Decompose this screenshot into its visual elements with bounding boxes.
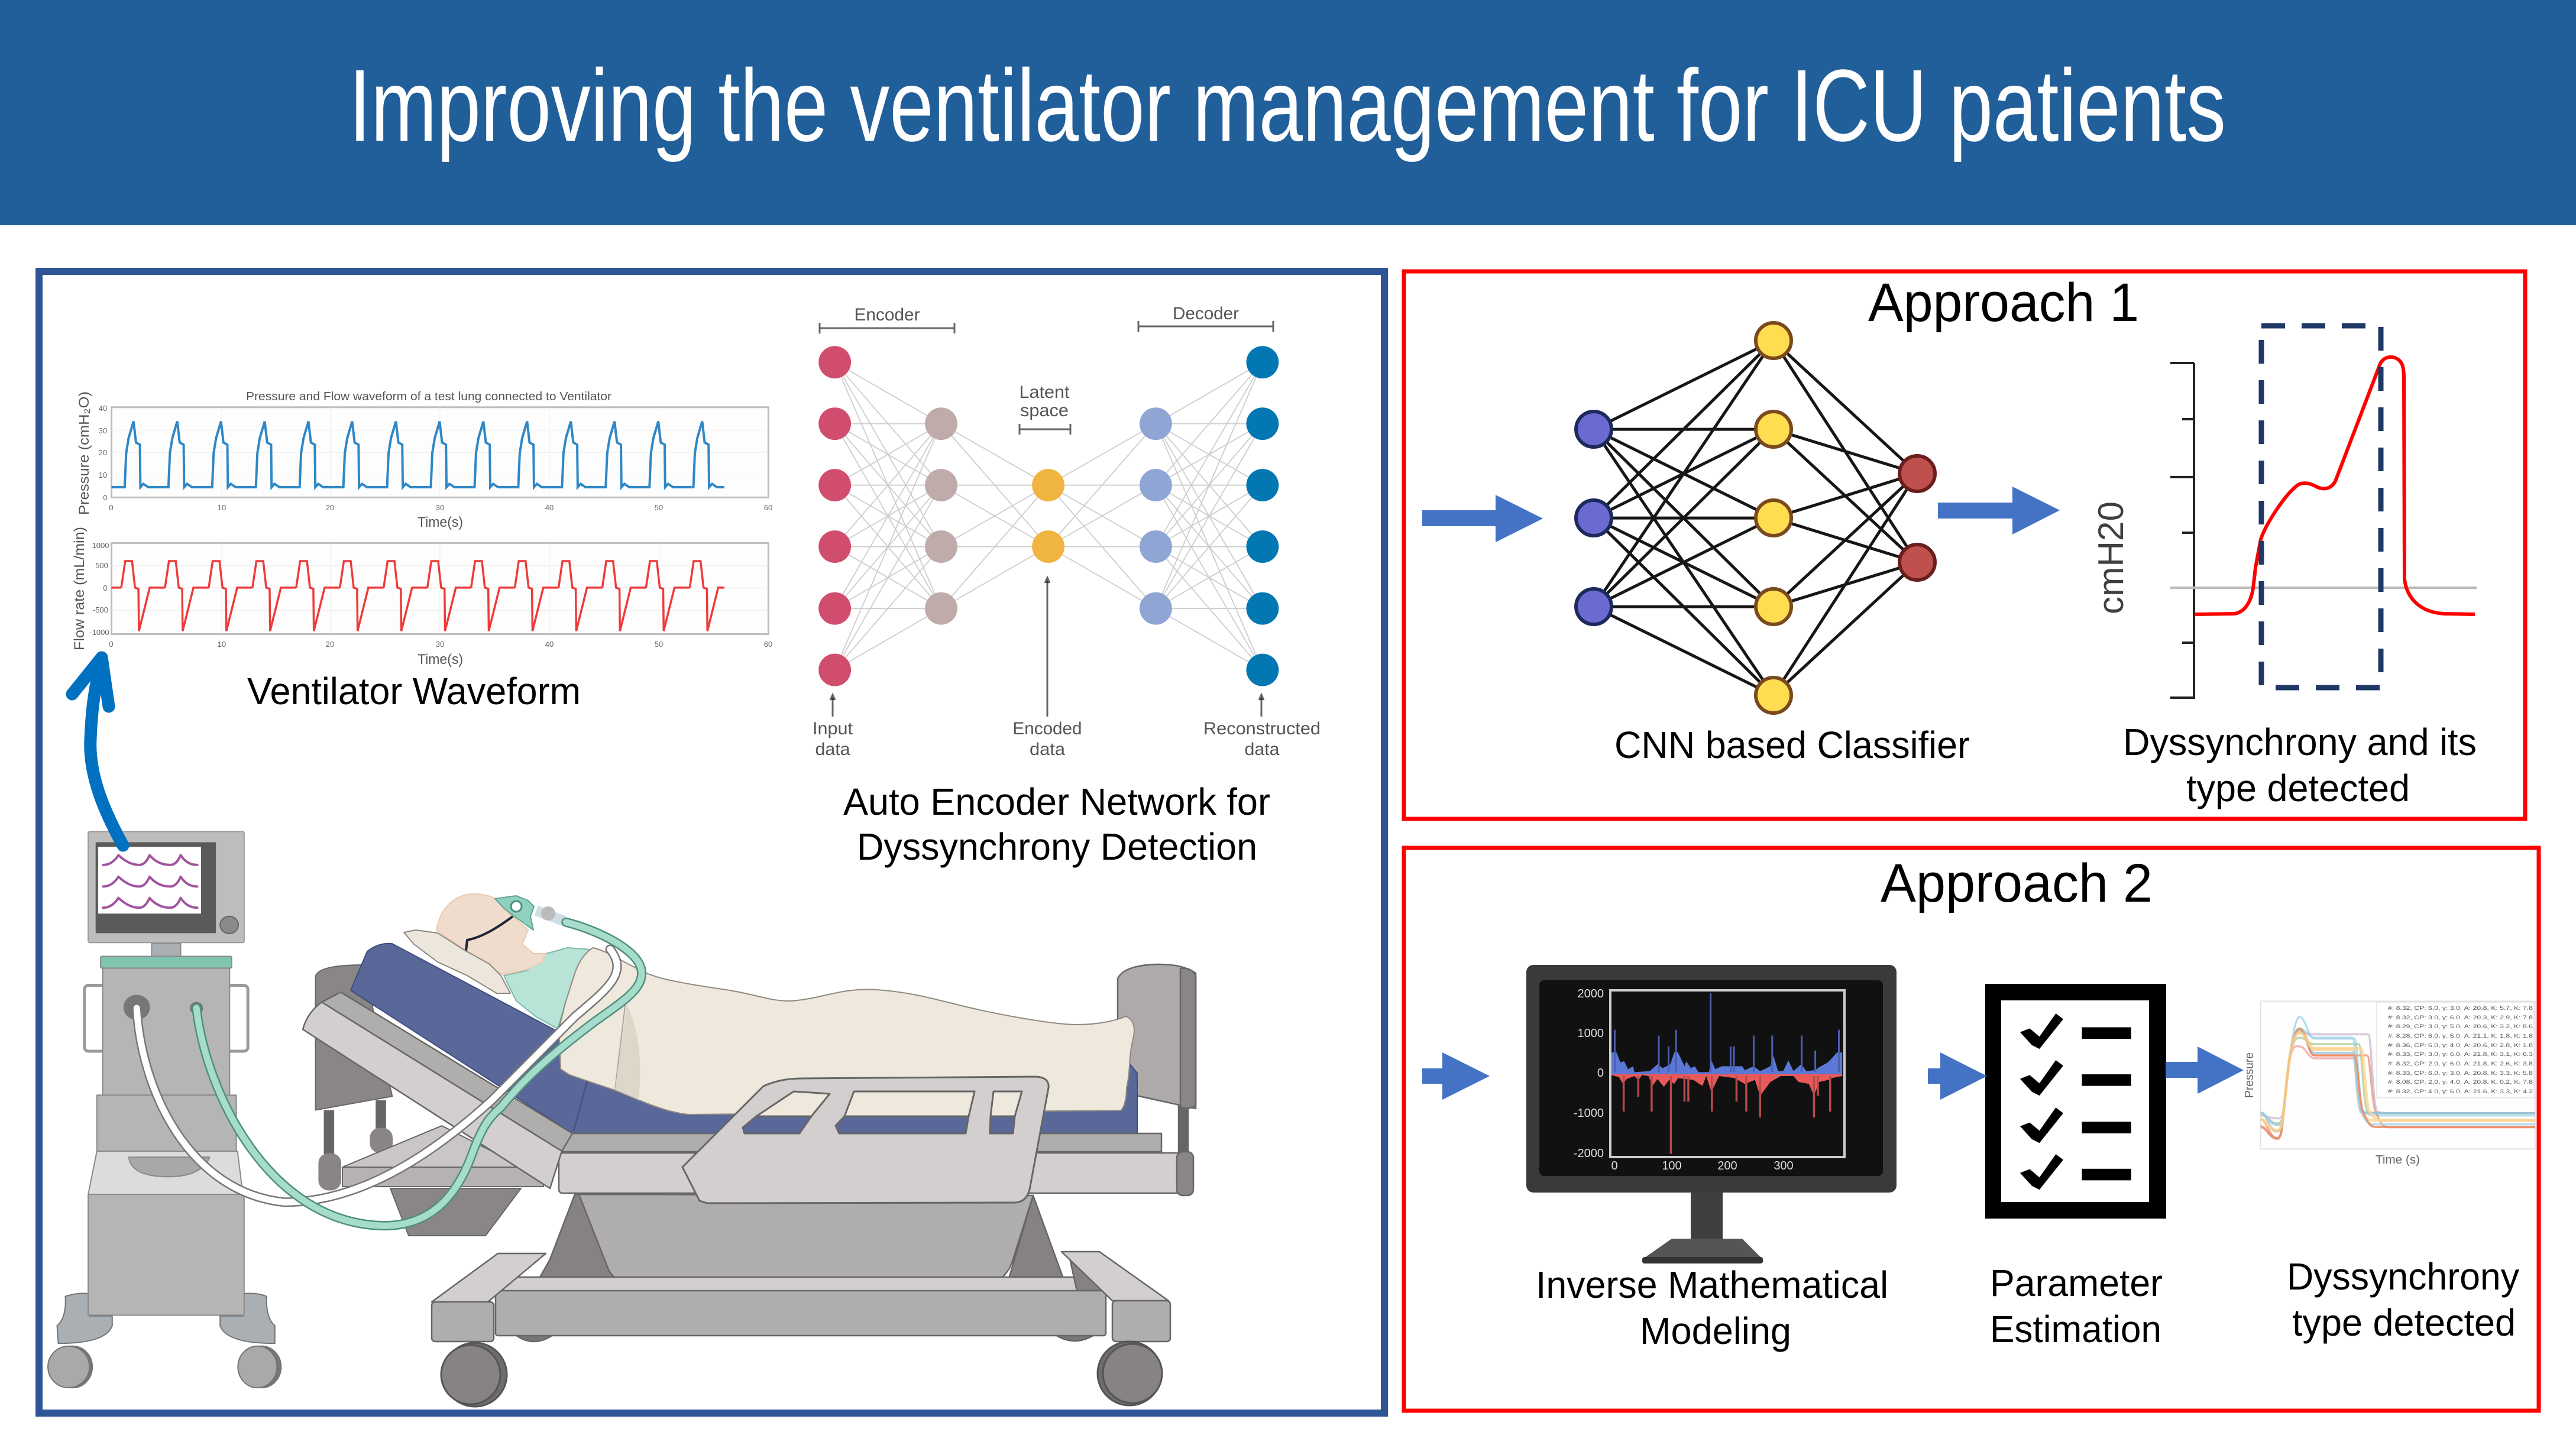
network caption: Auto Encoder Network for [843,780,1270,823]
chart legend [2388,1005,2533,1095]
icon: desktop monitor with spectrum: 0 [1611,1159,1618,1172]
icon: parameter checklist [1985,984,2166,1219]
time axis labels [418,514,463,668]
patient head [436,894,546,974]
parameter caption: Parameter [1990,1262,2163,1304]
blue mattress [351,944,1137,1133]
arrow: into modeling [1422,1052,1490,1100]
axis tick labels: 0 [103,584,108,592]
network labels [813,304,1321,759]
parameter caption: Estimation [1990,1308,2161,1350]
ventilator body [88,944,244,1315]
detection caption: Dyssynchrony and its [2123,721,2477,763]
detection caption [2123,721,2477,809]
network caption: Dyssynchrony Detection [857,825,1257,868]
foot board [1118,964,1196,1156]
classifier hidden nodes [1756,323,1791,713]
input nodes [818,346,851,686]
ventilator monitor [88,832,244,942]
brackets and pointer arrows [820,321,1273,717]
chart: dyssynchrony waveform [2091,326,2477,699]
head-end bed legs [316,965,393,1190]
chart legend: #: 8.33, CP: 3.0, γ: 6.0, A: 21.8, K: 3.1, K: 6.3 [2388,1051,2533,1058]
spectrum tick labels: 2000 [1578,987,1604,1000]
chart legend: #: 8.32, CP: 2.0, γ: 6.0, A: 21.8, K: 2.6, K: 3.8 [2388,1061,2533,1067]
diagram: CNN classifier [1576,323,1935,713]
axis tick labels: 500 [95,561,108,570]
modeling caption [1536,1263,1888,1352]
bed wheels [441,1342,1162,1407]
encoder nodes [925,407,957,625]
network labels: Latent [1020,383,1070,402]
chart legend: #: 8.29, CP: 3.0, γ: 5.0, A: 20.6, K: 3.2, K: 8.6 [2388,1023,2533,1030]
arrow: modeling to parameter [1928,1052,1987,1100]
chart axis labels: Pressure [2243,1052,2256,1098]
bed deck [303,992,1193,1196]
axis tick labels [89,404,772,649]
arrow: classifier to graph [1938,487,2060,534]
axis tick labels: 0 [109,640,114,649]
network edges [835,362,1263,670]
icon: desktop monitor with spectrum: 200 [1717,1159,1737,1172]
modeling caption: Modeling [1640,1310,1791,1352]
chart legend: #: 8.32, CP: 4.0, γ: 6.0, A: 21.6, K: 3.3, K: 4.2 [2388,1088,2533,1095]
spectrum tick labels [1574,987,1604,1160]
y axis label: cmH20 [2091,501,2131,614]
chart legend: #: 8.08, CP: 2.0, γ: 4.0, A: 20.8, K: 0.2, K: 7.8 [2388,1079,2533,1086]
axis tick labels: 1000 [92,541,109,550]
network labels: Input [813,719,853,738]
axis tick labels: 30 [436,640,444,649]
latent nodes [1032,469,1064,563]
bed base [432,1194,1170,1342]
arrow: into classifier [1422,495,1543,542]
axis tick labels: -500 [93,605,108,614]
arrow: parameter to result [2166,1047,2244,1094]
axis tick labels: 10 [99,471,107,480]
panel: patient and dyssynchrony detection [39,271,1384,1413]
icon: desktop monitor with spectrum [1526,965,1897,1263]
y axis labels [72,391,92,650]
diagram: auto encoder network [813,304,1321,868]
axis tick labels: 10 [218,640,226,649]
panel: approach 2 [1404,848,2539,1411]
network labels: data [815,740,850,759]
modeling caption: Inverse Mathematical [1536,1263,1888,1306]
waveform caption: Ventilator Waveform [247,670,581,712]
result caption [2287,1255,2519,1344]
gown [504,948,591,1029]
chart legend: #: 8.36, CP: 6.0, γ: 4.0, A: 20.6, K: 2.8, K: 1.8 [2388,1042,2533,1049]
axis tick labels: 40 [545,640,554,649]
axis tick labels: 50 [655,503,663,512]
output nodes [1246,346,1279,686]
icon: desktop monitor with spectrum: 100 [1662,1159,1682,1172]
detection caption: type detected [2186,767,2410,809]
network labels: space [1020,401,1069,420]
axis tick labels: 10 [218,503,226,512]
dashed detection box [2261,326,2381,688]
illustration: ventilator machine [48,832,642,1388]
axis tick labels: -1000 [89,628,109,637]
chart legend: #: 8.33, CP: 6.0, γ: 3.0, A: 20.8, K: 3.3, K: 5.8 [2388,1070,2533,1077]
ventilator handles [85,986,248,1051]
time axis labels: Time(s) [418,652,463,668]
network labels: Decoder [1173,304,1239,323]
axis tick labels: 60 [764,640,772,649]
axis tick labels: 40 [545,503,554,512]
under-deck mechanism [342,1126,543,1236]
pressure curve [2195,357,2475,614]
panel: approach 1 [1404,271,2525,819]
network labels: data [1244,740,1280,759]
network labels: Encoder [854,305,920,325]
classifier caption: CNN based Classifier [1614,724,1970,766]
pressure plot [111,407,768,497]
axis tick labels: 60 [764,503,772,512]
axis tick labels: 20 [99,448,107,457]
axis tick labels: 0 [103,493,108,502]
axis tick labels: 30 [99,426,107,435]
axis tick labels: 20 [326,640,334,649]
header banner [0,0,2576,225]
chart: simulated pressure curves: Time (s) [2376,1154,2420,1167]
classifier edges [1594,341,1917,695]
parameter caption [1990,1262,2163,1350]
result caption: Dyssynchrony [2287,1255,2519,1298]
axis tick labels: 0 [109,503,114,512]
spectrum tick labels: 1000 [1578,1027,1604,1040]
network labels: data [1030,740,1065,759]
network caption [843,780,1270,868]
classifier output nodes [1899,456,1935,580]
icon: desktop monitor with spectrum: 300 [1774,1159,1794,1172]
white breathing tube [137,950,617,1202]
axis tick labels: 50 [655,640,663,649]
monitor waves [103,855,198,908]
classifier input nodes [1576,412,1611,624]
approach 1 heading: Approach 1 [1868,273,2139,333]
pillow [404,930,510,993]
arrow: monitor to waveform [72,657,123,845]
axis tick labels: 20 [326,503,334,512]
zero line [2170,587,2477,589]
illustration: hospital bed and patient [303,894,1196,1407]
y axis labels: Flow rate (mL/min) [72,527,88,650]
time axis labels: Time(s) [418,514,463,530]
chart legend: #: 8.28, CP: 6.0, γ: 5.0, A: 21.1, K: 1.8, K: 1.8 [2388,1033,2533,1039]
approach 2 heading: Approach 2 [1881,853,2153,913]
side rail [682,1077,1048,1203]
y axis labels: Pressure (cmH₂O) [76,391,92,515]
chart legend: #: 8.32, CP: 6.0, γ: 3.0, A: 20.8, K: 5.7, K: 7.8 [2388,1005,2533,1012]
flow plot [111,543,768,634]
network labels: Encoded [1012,719,1082,738]
chart: ventilator waveforms [72,390,772,712]
spectrum tick labels: -1000 [1574,1107,1604,1120]
network labels: Reconstructed [1203,719,1321,738]
chart legend: #: 8.32, CP: 3.0, γ: 6.0, A: 20.3, K: 2.9, K: 7.8 [2388,1015,2533,1021]
spectrum tick labels: 0 [1597,1067,1604,1080]
spectrum chart [1611,993,1842,1154]
spectrum tick labels: -2000 [1574,1147,1604,1160]
result caption: type detected [2292,1301,2516,1344]
green breathing tube [196,922,642,1226]
ventilator feet and wheels [48,1293,281,1388]
y axis [2170,363,2194,699]
decoder nodes [1140,407,1172,625]
chart title: Pressure and Flow waveform of a test lung connected to Ventilator [246,390,611,403]
tube ports [124,994,203,1020]
axis tick labels: 40 [99,404,107,413]
chart: simulated pressure curves [2243,1001,2535,1167]
oxygen mask and connector [495,896,565,930]
blanket [559,948,1134,1115]
axis tick labels: 30 [436,503,444,512]
